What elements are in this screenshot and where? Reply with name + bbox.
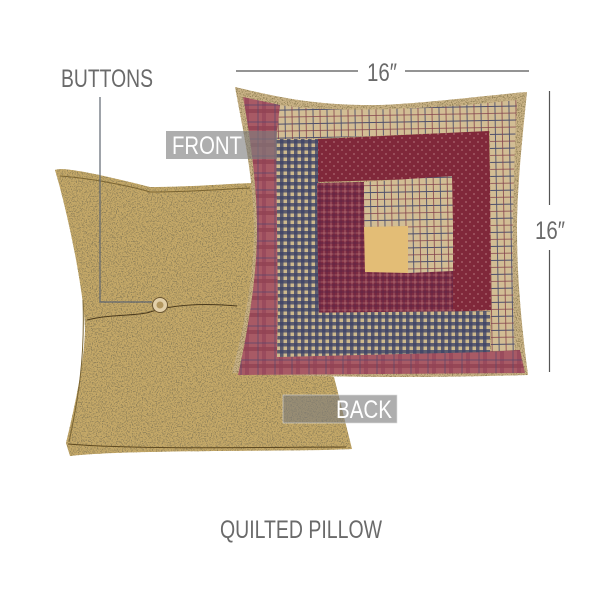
label: back: BACK [336, 396, 392, 424]
blue check left [276, 139, 319, 315]
back pillow [55, 169, 352, 456]
pillow edge [232, 87, 528, 377]
blue check bottom [277, 311, 490, 357]
tan plaid centre top [364, 176, 453, 227]
title: QUILTED PILLOW [220, 516, 382, 544]
tan plaid centre right [408, 225, 453, 273]
icon: button [152, 298, 168, 312]
centre square [364, 226, 408, 273]
back opening seam [87, 304, 237, 320]
bottom seam [68, 444, 346, 448]
label: buttons: BUTTONS [61, 65, 153, 93]
tan plaid border [276, 100, 517, 352]
red plaid border [238, 97, 525, 375]
left hem [69, 300, 83, 442]
label: back [283, 395, 397, 424]
front pillow [232, 87, 528, 377]
width dimension: 16″ [367, 59, 397, 87]
red plaid inner left [317, 182, 365, 272]
red dot top [318, 131, 490, 182]
label: front: FRONT [172, 132, 242, 160]
red dot right [452, 177, 491, 312]
red plaid inner bottom [318, 271, 453, 317]
top hem [60, 176, 250, 192]
callout line: buttons [100, 97, 152, 302]
height dimension: 16″ [535, 217, 565, 245]
